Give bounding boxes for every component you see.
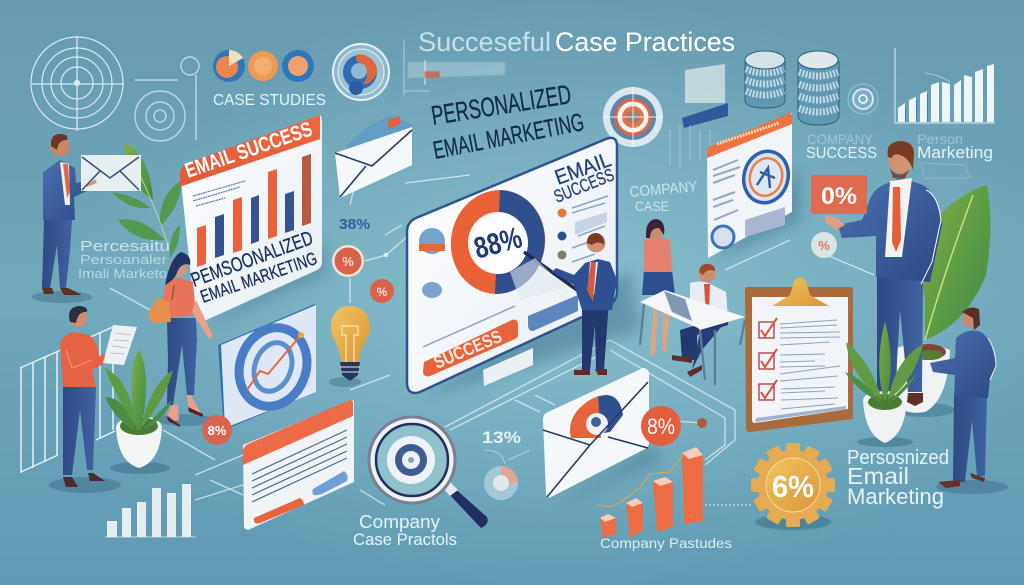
badges: percent circles: [332, 228, 417, 303]
card text: personalized email marketing: [188, 227, 320, 307]
label: company success: SUCCESS: [806, 145, 877, 162]
panel: rising chart card: [218, 304, 318, 430]
person: presenter at monitor: [510, 233, 617, 375]
person: man from behind: [930, 308, 1008, 494]
icon: gold gear badge: [751, 443, 835, 530]
3D bar chart orange: [597, 447, 703, 538]
badge: small percent circle: %: [818, 238, 830, 253]
connector lines: [110, 60, 874, 505]
list lines: [780, 320, 840, 409]
label: personalized left text: Persoanaler: [80, 252, 168, 267]
icon: cylinders: [745, 51, 839, 125]
panel: right report card: [707, 113, 800, 262]
label: person marketing: Marketing: [917, 143, 993, 162]
panel: text card with buttons: [243, 400, 354, 530]
callout: 0 percent box: 0%: [821, 183, 857, 210]
icon: light bulb: [329, 306, 370, 387]
monitor side badges: [419, 228, 445, 298]
monitor list rows: [558, 196, 608, 262]
icon: magnifying glass target: [369, 417, 488, 528]
pointer: [524, 252, 577, 290]
person: man holding envelope: [32, 134, 141, 303]
person: man in red sweater with paper: [20, 306, 137, 493]
label: personalized email marketing right: Email: [847, 463, 909, 489]
icon: bottom envelope: [543, 368, 660, 505]
plant behind left card: [112, 142, 182, 258]
label: company case practols: [353, 512, 457, 549]
blurred caption strip: [404, 40, 505, 95]
label: personalized left text: Imali Marketo: [78, 266, 167, 281]
card body: [180, 115, 322, 322]
clip: [772, 278, 829, 306]
panel: clipboard checklist: [745, 278, 853, 432]
person: standing woman: [642, 219, 675, 355]
blue button: [528, 295, 578, 331]
icon: target crosshair: [31, 36, 124, 131]
monitor body: [407, 138, 617, 393]
monitor heading: SUCCESS: [551, 165, 617, 207]
card header: [180, 115, 320, 188]
label: 88 percent small: 38%: [339, 216, 370, 233]
label: company success: [806, 131, 877, 162]
potted plant left: [105, 349, 173, 474]
label: company case: COMPANY: [629, 178, 698, 201]
small potted plant right: [845, 321, 923, 447]
bar chart: [197, 154, 311, 267]
badge: 8 percent orange: 8%: [647, 414, 675, 439]
donut chart: 88%: [471, 221, 526, 266]
panel: email success chart card: [180, 115, 330, 330]
card text: personalized email marketing: EMAIL MARKETING: [198, 248, 320, 307]
success button: SUCCESS: [431, 326, 505, 373]
label: person marketing: [917, 131, 993, 178]
icon: envelope top: [335, 116, 412, 198]
label: personalized email marketing right: Persosnized: [847, 447, 949, 469]
panel: main monitor: [407, 138, 640, 398]
big white pot: [895, 343, 955, 417]
monitor stand: [483, 348, 533, 386]
badge: 8 percent: [202, 415, 232, 445]
top right bar chart: [895, 48, 995, 123]
title: Case Practices: [555, 27, 735, 57]
badge: small percent circle: [811, 232, 837, 258]
heading: personalized email marketing: PERSONALIZED: [429, 79, 573, 131]
icon: central target: [603, 87, 663, 147]
donut chart: [443, 183, 553, 301]
label: company case: [629, 178, 698, 214]
monitor heading: EMAIL: [552, 148, 614, 190]
label: company pastudes: Company Pastudes: [600, 535, 732, 551]
badges: percent circles: %: [377, 285, 388, 299]
label: person marketing: Person: [917, 131, 963, 147]
badge: 8 percent orange: [641, 406, 707, 446]
icons: three case study badges: [213, 50, 314, 82]
person: man at laptop table: [640, 264, 745, 385]
label: company success: COMPANY: [807, 131, 874, 147]
card text: personalized email marketing: PEMSOONALIZED: [188, 227, 316, 292]
header text: EMAIL SUCCESS: [182, 118, 315, 183]
callout: 0 percent box: [811, 175, 867, 214]
small caption lines: [193, 181, 245, 206]
icon: small circle: [848, 84, 878, 114]
heading: personalized email marketing: EMAIL MARKETING: [431, 108, 586, 165]
person: big man in suit: [825, 141, 942, 406]
big leaf: [922, 185, 990, 340]
icon: small rings: [135, 57, 199, 141]
envelope donut: [570, 395, 623, 438]
badge: 8 percent: 8%: [208, 423, 227, 438]
label: company case: CASE: [635, 198, 669, 214]
person: woman with bag: [148, 252, 213, 427]
title: Succeseful: [418, 27, 551, 57]
title: [418, 27, 735, 57]
label: personalized left text: [78, 238, 170, 281]
monitor divider line: [423, 306, 515, 347]
label: personalized email marketing right: Marketing: [847, 484, 944, 509]
ghost document with tag: [670, 64, 728, 168]
label and mini donut: 13 percent: [482, 428, 530, 500]
badges: percent circles: %: [342, 254, 354, 269]
label: company case practols: Case Practols: [353, 530, 457, 549]
label: case studies: CASE STUDIES: [213, 92, 326, 109]
icon: gold gear badge: 6%: [772, 469, 814, 504]
icon: swirl medallion: [333, 44, 389, 100]
label: personalized left text: Percesaitu: [80, 238, 170, 255]
small bar chart: [105, 484, 196, 537]
heading: personalized email marketing: [429, 79, 586, 165]
monitor heading: [551, 148, 617, 207]
fence graphic: [20, 327, 115, 473]
label and mini donut: 13 percent: 13%: [482, 428, 521, 447]
check marks: [759, 318, 777, 400]
label: company case practols: Company: [359, 512, 440, 532]
label: personalized email marketing right: [847, 447, 949, 509]
